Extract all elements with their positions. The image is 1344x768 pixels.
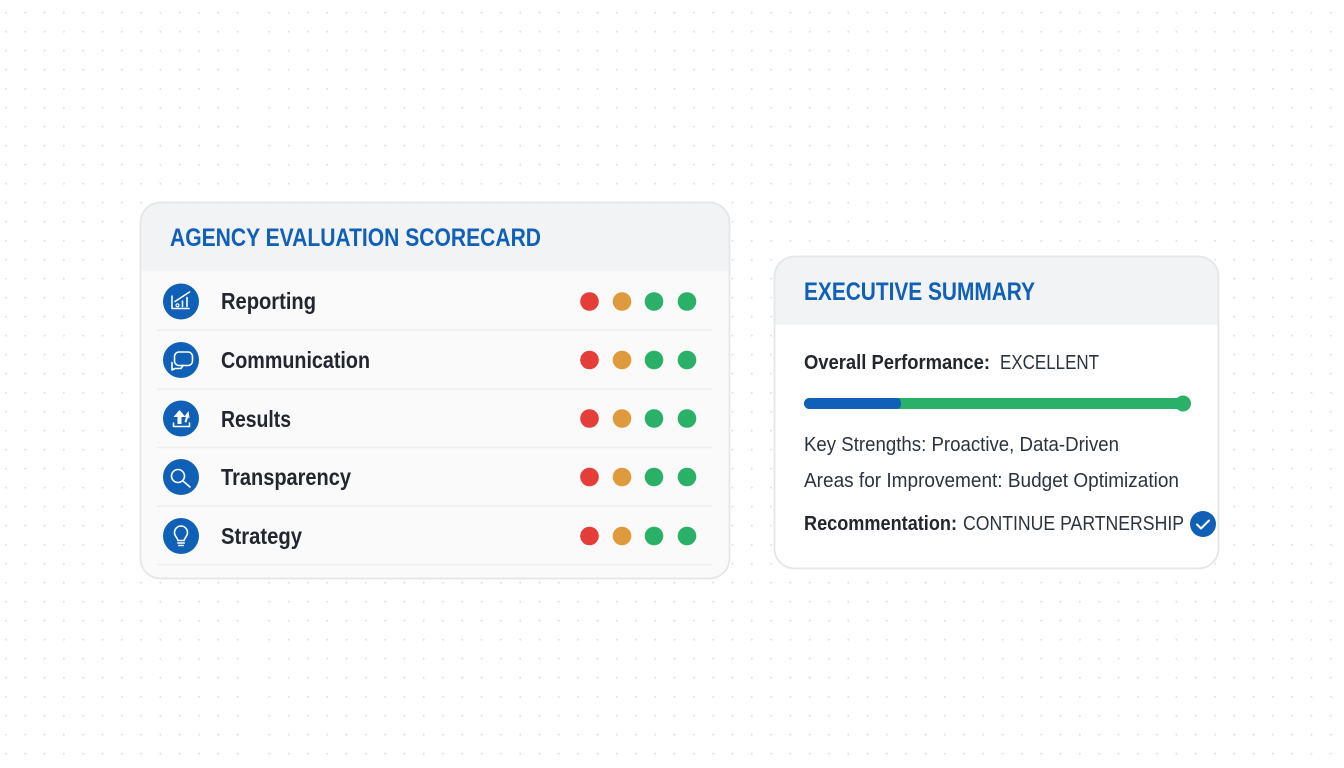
heading: executive summary: EXECUTIVE SUMMARY [804,278,1035,306]
icon: magnifying glass [163,459,199,495]
rating dots [580,351,696,369]
card background [140,202,730,579]
label: Results: Results [221,406,291,432]
row: Reporting [163,284,696,320]
row: Strategy [163,518,696,554]
text: overall performance: Overall Performance: [804,352,990,374]
text: key strengths: Key Strengths: Proactive, Data-Driven [804,434,1119,456]
text: recommendation [804,513,1184,535]
panel: executive summary [774,256,1219,569]
row: Results [163,400,696,436]
label: Communication: Communication [221,347,370,373]
label: Strategy: Strategy [221,523,302,549]
rating dots [580,527,696,545]
text: recommendation: CONTINUE PARTNERSHIP [963,513,1184,535]
card background [774,256,1219,569]
rating dots [580,292,696,311]
rating dots [580,468,696,486]
text: areas for improvement: Areas for Improvement: Budget Optimization [804,470,1179,492]
card header band [774,256,1219,325]
panel: agency evaluation scorecard [140,202,730,579]
progress bar [804,396,1191,412]
rating dots [580,409,696,428]
icon: upward arrows [163,400,199,436]
text: overall performance [804,352,1099,374]
label: Reporting: Reporting [221,288,316,314]
card header band [140,202,730,271]
row: Transparency [163,459,696,495]
heading: scorecard title: AGENCY EVALUATION SCORECARD [170,224,541,252]
icon: speech bubbles [163,342,199,378]
label: Transparency: Transparency [221,464,351,490]
icon: bar chart [163,284,199,320]
icon: check badge [1190,511,1216,537]
icon: light bulb [163,518,199,554]
text: recommendation: Recommentation: [804,513,957,535]
row: Communication [163,342,696,378]
text: overall performance: EXCELLENT [1000,352,1099,374]
